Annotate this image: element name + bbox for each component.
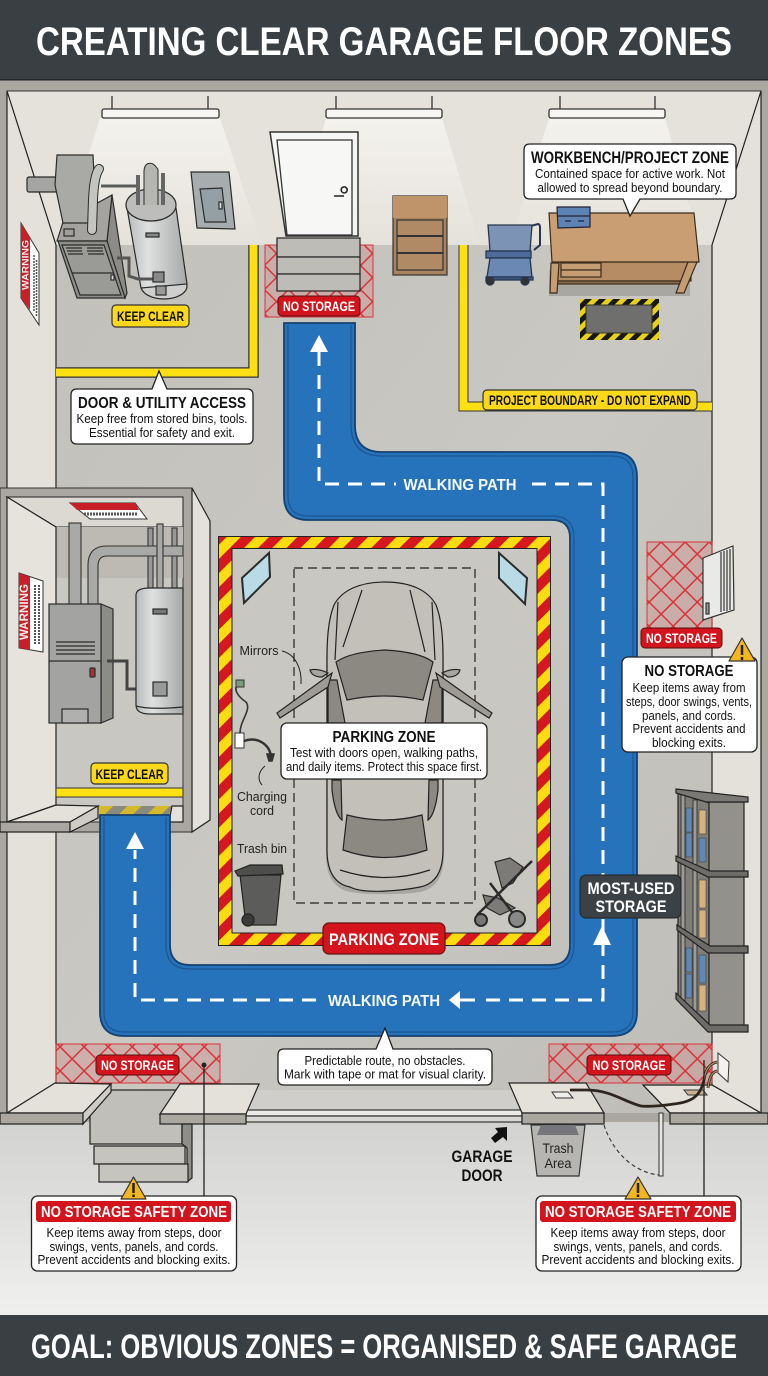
no storage label: bottom left bbox=[96, 1055, 179, 1075]
trash bin label: Trash bin bbox=[237, 841, 287, 856]
storage shelves bbox=[676, 789, 748, 1032]
parking zone callout: and daily items. Protect this space first. bbox=[286, 759, 482, 774]
walking path label: lower bbox=[320, 990, 482, 1010]
furnace bbox=[27, 155, 140, 298]
alcove water heater bbox=[136, 588, 183, 714]
mirror right bbox=[499, 553, 527, 604]
callout: door and utility access: Keep free from stored bins, tools. bbox=[76, 411, 248, 426]
no storage label: door bbox=[278, 296, 360, 316]
garage door label: DOOR bbox=[462, 1166, 502, 1185]
yellow line: alcove bbox=[56, 788, 183, 797]
wall warning sign: WARNING bbox=[20, 240, 30, 290]
parking zone border bbox=[218, 536, 550, 946]
electrical panel bbox=[191, 172, 235, 229]
no storage label: bottom right: NO STORAGE bbox=[592, 1057, 666, 1073]
alcove furnace bbox=[49, 604, 153, 723]
charging cord label: cord bbox=[250, 803, 274, 818]
hazard threshold bbox=[98, 806, 172, 815]
trash area: Area bbox=[544, 1156, 572, 1171]
callout: no storage: blocking exits. bbox=[652, 735, 726, 750]
callout: no storage: Keep items away from bbox=[632, 680, 746, 695]
parking space dashed outline bbox=[294, 568, 475, 903]
wall warning sign bbox=[20, 223, 39, 325]
walking path label: upper: WALKING PATH bbox=[404, 477, 516, 494]
stroller icon bbox=[475, 858, 532, 927]
parking zone callout bbox=[281, 723, 487, 779]
warning triangle: no storage bbox=[729, 638, 755, 661]
no storage hatch: bottom left bbox=[56, 1044, 220, 1083]
callout: no storage: NO STORAGE bbox=[644, 663, 734, 680]
parking zone label bbox=[323, 923, 445, 954]
alcove frame bbox=[0, 488, 210, 832]
toolbox bbox=[557, 207, 590, 228]
alcove lower ledge bbox=[0, 805, 183, 832]
charging cord label: Charging bbox=[237, 789, 287, 804]
no storage label: vent bbox=[641, 628, 722, 648]
trash bin icon bbox=[235, 865, 283, 926]
callout: workbench project zone bbox=[524, 144, 736, 216]
garage floor bbox=[56, 245, 712, 1113]
yellow boundary: project bbox=[464, 245, 712, 406]
keep clear label: alcove: KEEP CLEAR bbox=[96, 766, 164, 782]
callout: door and utility access bbox=[71, 371, 253, 444]
path arrows bbox=[126, 335, 611, 945]
alcove warning sign: wall bbox=[17, 573, 43, 652]
entry steps bbox=[94, 1124, 192, 1182]
callout: no storage safety zone right: Prevent accidents and blocking exits. bbox=[542, 1252, 734, 1267]
bottom wall ledges bbox=[0, 1083, 768, 1144]
no storage label: door: NO STORAGE bbox=[283, 298, 355, 314]
callout: workbench project zone: Contained space for active work. Not bbox=[535, 166, 725, 181]
keep clear label: top: KEEP CLEAR bbox=[117, 308, 184, 324]
callout: no storage safety zone right: Keep items away from steps, door bbox=[550, 1225, 726, 1240]
workbench bbox=[549, 213, 699, 296]
goal banner bbox=[0, 1315, 768, 1376]
door steps bbox=[277, 238, 360, 291]
no storage label: bottom left: NO STORAGE bbox=[101, 1057, 174, 1073]
project boundary label bbox=[483, 390, 697, 410]
trash area: Trash bbox=[542, 1141, 574, 1156]
garage door track bbox=[246, 1090, 522, 1122]
warning triangle: left bbox=[121, 1177, 146, 1199]
garage door label: GARAGE bbox=[452, 1147, 512, 1166]
alcove ductwork bbox=[69, 523, 183, 606]
car door right bbox=[436, 669, 492, 718]
callout: no storage: Prevent accidents and bbox=[632, 721, 746, 736]
callout: no storage safety zone left bbox=[32, 1196, 236, 1271]
keep clear label: alcove bbox=[91, 763, 168, 784]
warning triangle: right bbox=[625, 1177, 651, 1199]
callout: predictable route bbox=[278, 1028, 492, 1085]
most-used storage label: MOST-USED bbox=[588, 879, 674, 898]
yellow boundary: utility bbox=[56, 245, 254, 372]
trash area bbox=[531, 1125, 585, 1176]
garage door label bbox=[452, 1127, 512, 1185]
mirror left bbox=[242, 553, 270, 603]
callout: no storage safety zone left: swings, vents, panels, and cords. bbox=[50, 1239, 218, 1254]
charging cord label bbox=[237, 766, 287, 818]
walking path bbox=[100, 323, 637, 1036]
callout: no storage safety zone left: Keep items away from steps, door bbox=[46, 1225, 222, 1240]
no storage hatch: vent bbox=[647, 542, 712, 628]
no storage label: bottom right bbox=[587, 1055, 671, 1075]
callout: predictable route: Mark with tape or mat for visual clarity. bbox=[284, 1066, 486, 1082]
storage bins bbox=[686, 808, 706, 1011]
parking zone callout: PARKING ZONE bbox=[332, 729, 436, 746]
side door swing bbox=[604, 1113, 663, 1176]
callout: no storage bbox=[622, 657, 757, 752]
leader line right bbox=[703, 1060, 705, 1196]
callout: no storage: panels, and cords. bbox=[642, 708, 736, 723]
no storage hatch: door bbox=[265, 245, 373, 317]
callout: workbench project zone: allowed to spread beyond boundary. bbox=[538, 180, 722, 195]
no storage hatch: bottom right bbox=[549, 1044, 712, 1083]
most-used storage label bbox=[580, 875, 681, 918]
mirrors label bbox=[240, 643, 301, 684]
callout: no storage safety zone right bbox=[536, 1196, 741, 1271]
most-used storage label: STORAGE bbox=[596, 897, 666, 916]
callout: no storage safety zone left: NO STORAGE SAFETY ZONE bbox=[41, 1204, 227, 1221]
ceiling lights bbox=[102, 96, 665, 118]
callout: no storage safety zone right: NO STORAGE SAFETY ZONE bbox=[545, 1204, 731, 1221]
alcove warning sign: wall: WARNING bbox=[17, 584, 31, 640]
walking path label: lower: WALKING PATH bbox=[328, 993, 440, 1010]
callout: door and utility access: DOOR & UTILITY ACCESS bbox=[78, 395, 246, 412]
callout: no storage safety zone right: swings, vents, panels, and cords. bbox=[554, 1239, 722, 1254]
alcove warning sign: ceiling bbox=[70, 503, 147, 519]
leader line left bbox=[202, 1062, 206, 1196]
path dashes bbox=[135, 352, 603, 1000]
exterior wall background bbox=[0, 80, 768, 1125]
right wall bbox=[712, 91, 761, 1113]
rolling cart bbox=[486, 224, 540, 285]
driveway outside bbox=[0, 1122, 768, 1317]
callout: door and utility access: Essential for safety and exit. bbox=[89, 425, 235, 440]
door bbox=[270, 132, 358, 236]
car door left bbox=[277, 669, 332, 718]
storage cabinet bbox=[393, 196, 447, 275]
wall outlet and cords bbox=[552, 1053, 729, 1106]
title banner bbox=[0, 0, 768, 80]
charging cord icon bbox=[235, 680, 274, 761]
mirrors label: Mirrors bbox=[240, 643, 279, 658]
callout: no storage safety zone left: Prevent accidents and blocking exits. bbox=[38, 1252, 230, 1267]
car bbox=[277, 582, 492, 894]
water heater bbox=[117, 168, 187, 299]
parking zone callout: Test with doors open, walking paths, bbox=[290, 745, 478, 760]
wall vent bbox=[703, 546, 734, 620]
parking zone label: PARKING ZONE bbox=[329, 930, 439, 949]
project boundary label: PROJECT BOUNDARY - DO NOT EXPAND bbox=[489, 393, 691, 408]
keep clear label: top bbox=[112, 305, 189, 327]
back wall bbox=[7, 91, 761, 247]
hazard floor mat bbox=[580, 299, 659, 340]
callout: predictable route: Predictable route, no obstacles. bbox=[304, 1053, 466, 1068]
left wall bbox=[7, 91, 56, 1113]
no storage label: vent: NO STORAGE bbox=[646, 630, 717, 646]
